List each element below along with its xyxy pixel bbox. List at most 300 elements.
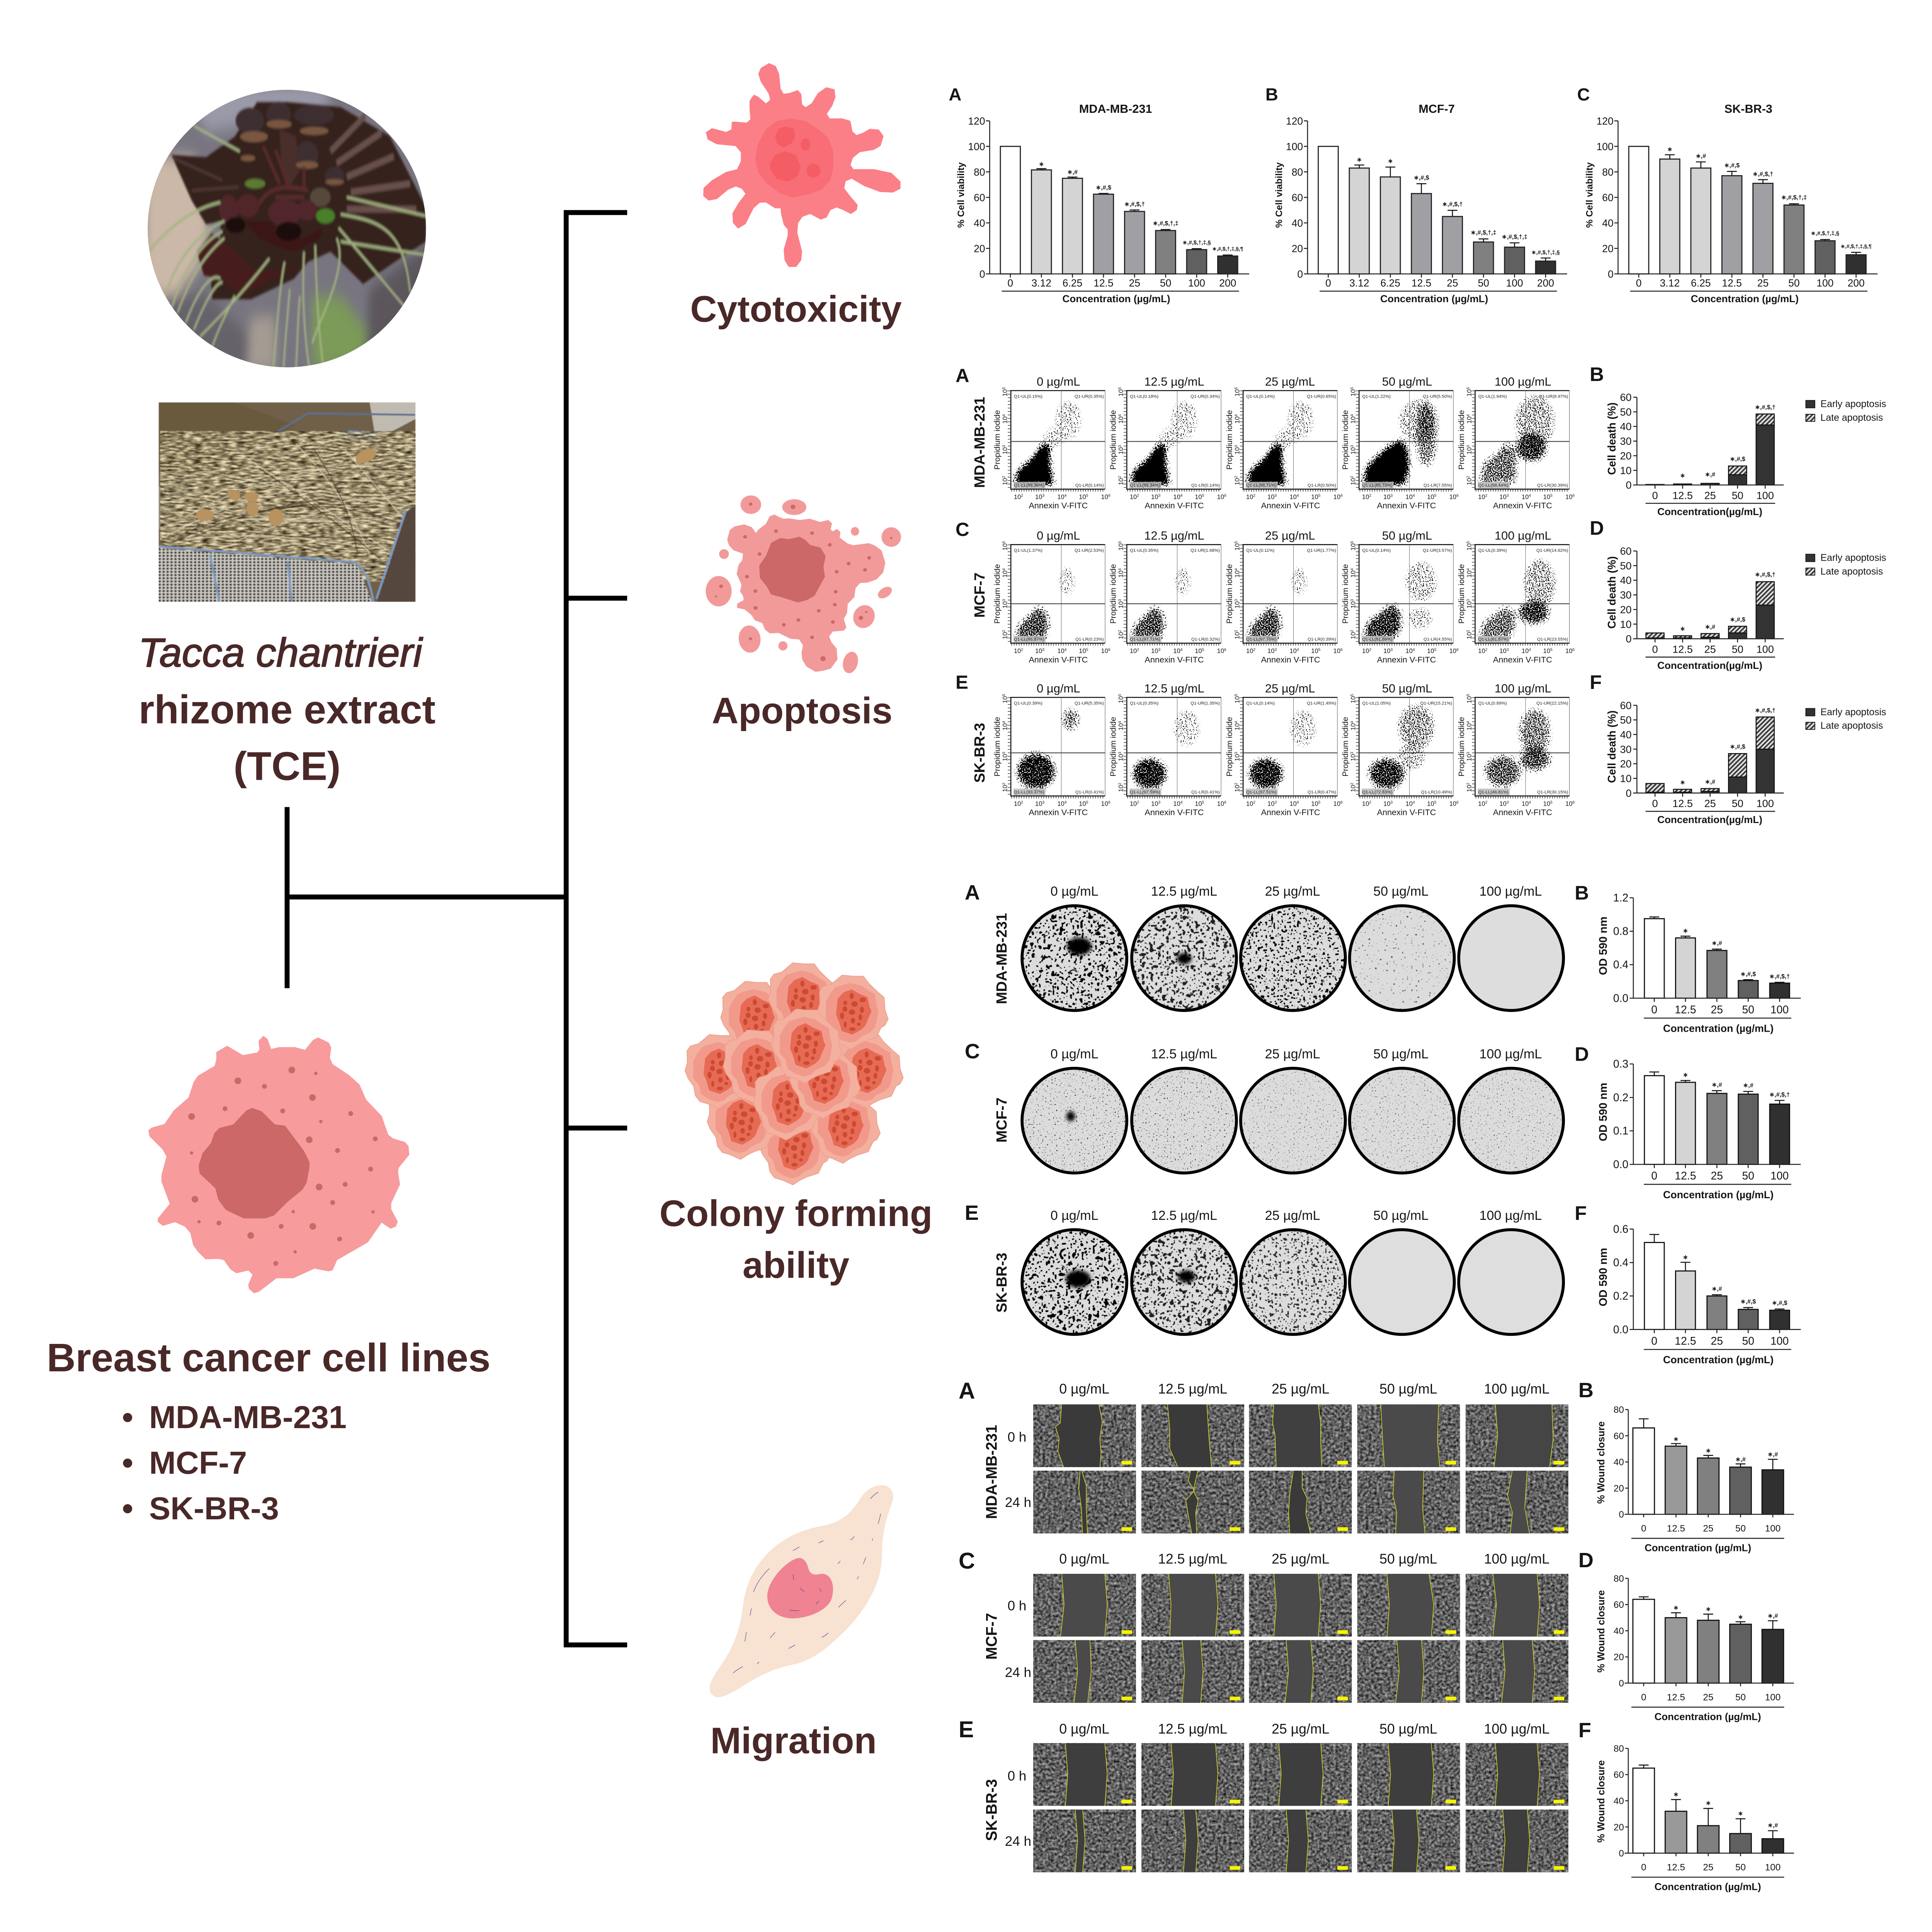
chart D: MCF-7 wound closure: 60 — [1614, 1600, 1624, 1610]
chart B: MCF-7 viability: % Cell viability — [1274, 162, 1284, 228]
image 50 µg/mL 24 h — [1357, 1469, 1460, 1535]
row C: MCF-7 plates: C — [965, 1040, 980, 1063]
row E: SK-BR-3 scatter plots: 0 µg/mL — [1037, 682, 1080, 695]
plot 25 µg/mL: Q1-LL(97.75%) — [1246, 637, 1277, 642]
chart B: MCF-7 viability: 3.12 — [1349, 277, 1369, 289]
chart C: SK-BR-3 viability: 3.12 — [1660, 277, 1680, 289]
row A: MDA-MB-231 wound images — [959, 1378, 1568, 1535]
chart D: MCF-7 OD: ∗ — [1683, 1072, 1688, 1078]
chart C: SK-BR-3 viability: 40 — [1602, 217, 1614, 229]
plot 12.5 µg/mL: Q1-UL(0.35%) — [1130, 701, 1158, 706]
chart B: MCF-7 viability: ∗ — [1357, 157, 1362, 163]
legend: Late apoptosis — [1820, 566, 1883, 577]
plot 12.5 µg/mL — [1109, 694, 1226, 817]
image 12.5 µg/mL 0 h — [1141, 1742, 1244, 1807]
chart D: MCF-7 OD: 0 — [1651, 1170, 1657, 1182]
chart D: MCF-7 OD: D — [1575, 1043, 1589, 1065]
chart A: MDA-MB-231 viability: 12.5 — [1094, 277, 1114, 289]
chart F: SK-BR-3 wound closure: 25 — [1703, 1862, 1713, 1873]
chart F: SK-BR-3 OD: 100 — [1770, 1335, 1789, 1347]
plot 12.5 µg/mL: Q1-LR(0.32%) — [1191, 637, 1220, 642]
plot 25 µg/mL: Q1-LR(0.50%) — [1308, 483, 1336, 488]
row E: SK-BR-3 wound images: 25 µg/mL — [1272, 1721, 1330, 1737]
row A: MDA-MB-231 wound images: 24 h — [1005, 1495, 1031, 1510]
chart B: MCF-7 viability: ∗,#,$,†,‡ — [1502, 234, 1527, 240]
plot 12.5 µg/mL: Q1-LR(0.41%) — [1191, 790, 1220, 795]
row C: MCF-7 plates: MCF-7 — [993, 1097, 1010, 1143]
plot 25 µg/mL: Q1-LR(0.47%) — [1308, 790, 1336, 795]
chart A: MDA-MB-231 viability: ∗,#,$,† — [1124, 201, 1145, 207]
image 100 µg/mL 24 h — [1466, 1469, 1568, 1535]
plot 100 µg/mL: Q1-LR(30.15%) — [1537, 790, 1568, 795]
chart A: MDA-MB-231 viability: A — [949, 85, 961, 104]
row A: MDA-MB-231 wound images: 25 µg/mL — [1272, 1381, 1330, 1397]
plot 0 µg/mL: Q1-LR(0.41%) — [1075, 790, 1104, 795]
chart C: SK-BR-3 viability: ∗,# — [1696, 153, 1706, 160]
chart B: MDA-MB-231 cell death: 50 — [1620, 406, 1632, 418]
legend — [1806, 707, 1886, 731]
chart B: MCF-7 viability: 0 — [1297, 268, 1303, 280]
legend — [1806, 399, 1886, 423]
row C: MCF-7 scatter plots: C — [956, 519, 969, 540]
abbreviation: (TCE) — [233, 744, 341, 789]
chart F: SK-BR-3 OD: ∗ — [1683, 1254, 1688, 1261]
chart F: SK-BR-3 cell death: ∗,#,$ — [1730, 743, 1745, 750]
species name: Tacca chantrieri — [138, 630, 423, 675]
chart B: MCF-7 viability: 120 — [1286, 115, 1303, 127]
chart D: MCF-7 cell death: 40 — [1620, 574, 1632, 586]
plot 100 µg/mL: Propidium iodide — [1457, 717, 1466, 777]
chart D: MCF-7 wound closure: ∗ — [1673, 1605, 1679, 1611]
plot 50 µg/mL: Q1-UL(0.14%) — [1362, 548, 1391, 553]
row A: MDA-MB-231 scatter plots: MDA-MB-231 — [971, 397, 988, 488]
chart B: MCF-7 viability: 100 — [1506, 277, 1523, 289]
image 25 µg/mL 24 h — [1249, 1469, 1352, 1535]
chart B: MDA-MB-231 cell death: 0 — [1626, 479, 1632, 491]
image 100 µg/mL 24 h — [1466, 1808, 1568, 1874]
chart D: MCF-7 cell death: D — [1590, 517, 1604, 539]
image 25 µg/mL 0 h — [1249, 1403, 1352, 1468]
plot 25 µg/mL: Q1-LR(0.39%) — [1308, 637, 1336, 642]
chart F: SK-BR-3 wound closure: ∗,# — [1768, 1822, 1778, 1829]
chart B: MDA-MB-231 cell death: Concentration(µg/mL) — [1657, 506, 1762, 517]
row A: MDA-MB-231 plates: A — [965, 881, 980, 904]
chart A: MDA-MB-231 viability: ∗,#,$,†,‡,§ — [1182, 240, 1211, 246]
image 0 µg/mL 24 h — [1033, 1808, 1136, 1874]
chart A: MDA-MB-231 viability: ∗ — [1039, 161, 1044, 168]
plot 0 µg/mL: Q1-LR(0.23%) — [1075, 637, 1104, 642]
image 25 µg/mL 0 h — [1249, 1742, 1352, 1807]
plot 25 µg/mL: Annexin V-FITC — [1261, 808, 1320, 817]
chart B: MCF-7 viability — [1265, 85, 1567, 304]
chart F: SK-BR-3 cell death: 30 — [1620, 743, 1632, 755]
image 0 µg/mL 0 h — [1033, 1403, 1136, 1468]
row C: MCF-7 wound images: 12.5 µg/mL — [1158, 1551, 1227, 1567]
row A: MDA-MB-231 wound images: 0 µg/mL — [1059, 1381, 1109, 1397]
chart F: SK-BR-3 wound closure: ∗ — [1738, 1811, 1743, 1817]
bullet MDA-MB-231: MDA-MB-231 — [149, 1399, 347, 1435]
row C: MCF-7 plates: 100 µg/mL — [1480, 1047, 1542, 1061]
plot 25 µg/mL: Q1-LL(98.71%) — [1246, 483, 1277, 488]
plot 100 µg/mL: Annexin V-FITC — [1493, 655, 1552, 664]
chart D: MCF-7 wound closure: 25 — [1703, 1692, 1713, 1703]
plot 25 µg/mL: Q1-UL(0.14%) — [1246, 394, 1275, 399]
row C: MCF-7 plates: 12.5 µg/mL — [1151, 1047, 1217, 1061]
chart F: SK-BR-3 OD: OD 590 nm — [1597, 1248, 1609, 1306]
chart F: SK-BR-3 cell death — [1590, 671, 1886, 825]
image 25 µg/mL 0 h — [1249, 1573, 1352, 1638]
photo: Tacca chantrieri flower — [145, 85, 430, 374]
chart B: MCF-7 viability: 20 — [1292, 243, 1303, 254]
row A: MDA-MB-231 plates: 12.5 µg/mL — [1151, 884, 1217, 899]
row A: MDA-MB-231 scatter plots: 0 µg/mL — [1037, 375, 1080, 388]
chart C: SK-BR-3 viability: 200 — [1848, 277, 1865, 289]
chart C: SK-BR-3 viability — [1577, 85, 1878, 304]
plot 0 µg/mL: Annexin V-FITC — [1029, 501, 1088, 510]
image 0 µg/mL 0 h — [1033, 1573, 1136, 1638]
plot 0 µg/mL: Propidium iodide — [993, 564, 1002, 624]
chart A: MDA-MB-231 viability: 120 — [968, 115, 985, 127]
row E: SK-BR-3 wound images: 12.5 µg/mL — [1158, 1721, 1227, 1737]
chart B: MDA-MB-231 cell death — [1590, 363, 1886, 517]
row C: MCF-7 wound images: C — [959, 1548, 975, 1573]
row E: SK-BR-3 wound images: E — [959, 1717, 974, 1742]
chart B: MDA-MB-231 OD: B — [1575, 882, 1589, 904]
chart D: MCF-7 wound closure: % Wound closure — [1596, 1590, 1607, 1673]
chart A: MDA-MB-231 viability: 0 — [1007, 277, 1013, 289]
chart B: MDA-MB-231 cell death: ∗,#,$ — [1730, 456, 1745, 463]
chart C: SK-BR-3 viability: 100 — [1597, 141, 1614, 152]
row A: MDA-MB-231 scatter plots: 25 µg/mL — [1265, 375, 1315, 388]
legend: Early apoptosis — [1820, 707, 1886, 718]
chart B: MCF-7 viability: Concentration (µg/mL) — [1380, 293, 1488, 304]
chart C: SK-BR-3 viability: ∗,#,$,† — [1753, 171, 1773, 177]
chart B: MDA-MB-231 OD: 0.4 — [1613, 959, 1628, 971]
chart D: MCF-7 wound closure: ∗,# — [1768, 1613, 1778, 1619]
plot 12.5 µg/mL: Q1-LL(97.59%) — [1130, 790, 1160, 795]
chart F: SK-BR-3 wound closure: F — [1578, 1719, 1591, 1742]
chart D: MCF-7 wound closure: 12.5 — [1667, 1692, 1685, 1703]
row E: SK-BR-3 wound images: 0 µg/mL — [1059, 1721, 1109, 1737]
chart F: SK-BR-3 cell death: 60 — [1620, 699, 1632, 711]
row E: SK-BR-3 scatter plots: 12.5 µg/mL — [1144, 682, 1204, 695]
chart B: MCF-7 viability: 40 — [1292, 217, 1303, 229]
chart D: MCF-7 cell death: 25 — [1704, 643, 1716, 655]
chart B: MDA-MB-231 wound closure: ∗ — [1673, 1436, 1679, 1442]
chart D: MCF-7 wound closure: 20 — [1614, 1652, 1624, 1663]
chart A: MDA-MB-231 viability — [949, 85, 1249, 304]
dark leaf and flower mass — [172, 102, 426, 299]
chart B: MDA-MB-231 wound closure: % Wound closure — [1596, 1421, 1607, 1504]
chart D: MCF-7 wound closure: 40 — [1614, 1626, 1624, 1636]
plot 100 µg/mL: Q1-UR(8.97%) — [1539, 394, 1568, 399]
chart C: SK-BR-3 viability: 12.5 — [1722, 277, 1742, 289]
chart D: MCF-7 OD: ∗,# — [1712, 1082, 1722, 1088]
chart B: MCF-7 viability: 25 — [1447, 277, 1458, 289]
panel: colony forming plates — [965, 881, 1564, 1335]
chart B: MDA-MB-231 OD — [1575, 882, 1801, 1034]
row E: SK-BR-3 wound images: 50 µg/mL — [1379, 1721, 1437, 1737]
chart D: MCF-7 OD: Concentration (µg/mL) — [1663, 1189, 1774, 1201]
chart D: MCF-7 cell death: 20 — [1620, 604, 1632, 616]
chart B: MCF-7 viability: MCF-7 — [1418, 102, 1455, 116]
plot 0 µg/mL — [993, 694, 1111, 817]
plate 100 µg/mL — [1458, 1229, 1564, 1335]
plot 25 µg/mL — [1225, 694, 1343, 817]
row A: MDA-MB-231 plates: 25 µg/mL — [1265, 884, 1320, 899]
chart D: MCF-7 cell death: 60 — [1620, 545, 1632, 557]
chart B: MDA-MB-231 wound closure: 12.5 — [1667, 1524, 1685, 1534]
plot 25 µg/mL: Q1-UL(0.14%) — [1246, 701, 1275, 706]
chart B: MCF-7 viability: 60 — [1292, 192, 1303, 203]
chart B: MDA-MB-231 OD: 25 — [1711, 1003, 1723, 1016]
chart B: MCF-7 viability: 6.25 — [1380, 277, 1400, 289]
image 50 µg/mL 24 h — [1357, 1808, 1460, 1874]
chart B: MDA-MB-231 cell death: 60 — [1620, 391, 1632, 403]
plot 100 µg/mL — [1457, 541, 1575, 664]
chart B: MDA-MB-231 wound closure: 25 — [1703, 1524, 1713, 1534]
plot 12.5 µg/mL: Q1-LL(99.34%) — [1130, 483, 1160, 488]
chart F: SK-BR-3 wound closure — [1578, 1719, 1794, 1893]
plot 50 µg/mL — [1341, 387, 1459, 510]
chart B: MDA-MB-231 cell death: B — [1590, 363, 1604, 385]
row E: SK-BR-3 plates: 100 µg/mL — [1480, 1208, 1542, 1223]
legend: Early apoptosis — [1820, 399, 1886, 410]
chart C: SK-BR-3 viability: 120 — [1597, 115, 1614, 127]
row C: MCF-7 plates: 0 µg/mL — [1051, 1047, 1099, 1061]
row C: MCF-7 scatter plots: 50 µg/mL — [1382, 529, 1432, 543]
plot 100 µg/mL: Annexin V-FITC — [1493, 808, 1552, 817]
chart F: SK-BR-3 OD: 0 — [1651, 1335, 1657, 1347]
chart F: SK-BR-3 cell death: Cell death (%) — [1606, 711, 1618, 783]
chart A: MDA-MB-231 viability: 6.25 — [1063, 277, 1082, 289]
image 12.5 µg/mL 24 h — [1141, 1639, 1244, 1704]
plot 25 µg/mL: Q1-UL(0.11%) — [1246, 548, 1274, 553]
chart A: MDA-MB-231 viability: ∗,#,$ — [1096, 184, 1111, 191]
row C: MCF-7 wound images: 50 µg/mL — [1379, 1551, 1437, 1567]
chart A: MDA-MB-231 viability: 20 — [974, 243, 985, 254]
chart B: MDA-MB-231 cell death: ∗,#,$,† — [1755, 404, 1776, 411]
chart D: MCF-7 cell death: 100 — [1757, 643, 1774, 655]
chart D: MCF-7 wound closure: 0 — [1619, 1678, 1624, 1689]
chart B: MDA-MB-231 cell death: ∗,# — [1705, 471, 1715, 478]
row E: SK-BR-3 plates: 12.5 µg/mL — [1151, 1208, 1217, 1223]
chart F: SK-BR-3 OD: 0.2 — [1613, 1290, 1628, 1303]
plot 12.5 µg/mL: Propidium iodide — [1109, 717, 1117, 777]
chart D: MCF-7 OD: 0.3 — [1613, 1058, 1628, 1070]
plot 25 µg/mL: Propidium iodide — [1225, 717, 1234, 777]
chart B: MDA-MB-231 OD: 0.8 — [1613, 925, 1628, 938]
row A: MDA-MB-231 scatter plots: 100 µg/mL — [1495, 375, 1551, 388]
image 50 µg/mL 0 h — [1357, 1403, 1460, 1468]
row C: MCF-7 wound images: 24 h — [1005, 1665, 1031, 1680]
row C: MCF-7 plates: 25 µg/mL — [1265, 1047, 1320, 1061]
row E: SK-BR-3 scatter plots: E — [956, 672, 968, 693]
row A: MDA-MB-231 plates: 100 µg/mL — [1480, 884, 1542, 899]
row E: SK-BR-3 scatter plots: SK-BR-3 — [971, 723, 988, 783]
chart D: MCF-7 OD: 0.2 — [1613, 1092, 1628, 1104]
plot 100 µg/mL: Propidium iodide — [1457, 564, 1466, 624]
chart F: SK-BR-3 wound closure: 60 — [1614, 1770, 1624, 1780]
chart D: MCF-7 cell death: ∗,#,$,† — [1755, 571, 1776, 578]
plot 25 µg/mL: Q1-UR(1.77%) — [1307, 548, 1336, 553]
plate 0 µg/mL — [1021, 905, 1128, 1011]
row C: MCF-7 wound images: 0 h — [1008, 1599, 1026, 1614]
plot 12.5 µg/mL: Annexin V-FITC — [1145, 808, 1204, 817]
plot 0 µg/mL: Q1-UL(0.39%) — [1014, 701, 1043, 706]
plot 50 µg/mL: Annexin V-FITC — [1377, 501, 1436, 510]
chart B: MDA-MB-231 OD: ∗,# — [1712, 940, 1722, 947]
row E: SK-BR-3 plates: 25 µg/mL — [1265, 1208, 1320, 1223]
plot 0 µg/mL: Q1-LL(99.36%) — [1014, 483, 1044, 488]
chart F: SK-BR-3 wound closure: % Wound closure — [1596, 1760, 1607, 1843]
image 50 µg/mL 0 h — [1357, 1742, 1460, 1807]
chart D: MCF-7 cell death: ∗ — [1680, 626, 1685, 632]
chart B: MDA-MB-231 OD: OD 590 nm — [1597, 917, 1609, 975]
plot 12.5 µg/mL: Propidium iodide — [1109, 564, 1117, 624]
plot 50 µg/mL: Q1-UL(1.22%) — [1362, 394, 1391, 399]
chart C: SK-BR-3 viability: 80 — [1602, 166, 1614, 178]
plot 50 µg/mL: Q1-LR(7.55%) — [1423, 483, 1452, 488]
chart F: SK-BR-3 OD: 0.0 — [1613, 1323, 1628, 1336]
chart C: SK-BR-3 viability: ∗ — [1667, 146, 1672, 153]
chart A: MDA-MB-231 viability: 0 — [980, 268, 985, 280]
plot 12.5 µg/mL: Annexin V-FITC — [1145, 655, 1204, 664]
chart C: SK-BR-3 viability: C — [1577, 85, 1590, 104]
chart F: SK-BR-3 OD: 12.5 — [1675, 1335, 1696, 1347]
row E: SK-BR-3 scatter plots: 25 µg/mL — [1265, 682, 1315, 695]
plot 100 µg/mL: Q1-LR(23.55%) — [1537, 637, 1568, 642]
chart B: MDA-MB-231 OD: ∗ — [1683, 928, 1688, 934]
chart C: SK-BR-3 viability: SK-BR-3 — [1725, 102, 1772, 116]
plot 50 µg/mL: Propidium iodide — [1341, 564, 1350, 624]
plate 12.5 µg/mL — [1131, 1068, 1237, 1173]
row C: MCF-7 scatter plots: MCF-7 — [971, 573, 988, 618]
chart C: SK-BR-3 viability: ∗,#,$,†,‡ — [1781, 194, 1807, 201]
row C: MCF-7 wound images: 25 µg/mL — [1272, 1551, 1330, 1567]
chart F: SK-BR-3 OD: ∗,#,$ — [1740, 1299, 1756, 1305]
plate 0 µg/mL — [1021, 1068, 1128, 1173]
plot 50 µg/mL: Q1-UL(1.05%) — [1362, 701, 1391, 706]
chart B: MDA-MB-231 wound closure: ∗,# — [1768, 1451, 1778, 1458]
panel: cytotoxicity bar charts — [949, 85, 1878, 304]
heading: breast cancer cell lines: Breast cancer cell lines — [47, 1335, 490, 1380]
chart B: MDA-MB-231 OD: 100 — [1770, 1003, 1789, 1016]
chart B: MCF-7 viability: ∗,#,$,†,‡ — [1471, 230, 1497, 236]
row E: SK-BR-3 plates: 0 µg/mL — [1051, 1208, 1099, 1223]
row C: MCF-7 scatter plots: 25 µg/mL — [1265, 529, 1315, 543]
plot 50 µg/mL: Q1-LL(85.73%) — [1362, 483, 1393, 488]
image 12.5 µg/mL 0 h — [1141, 1403, 1244, 1468]
chart B: MDA-MB-231 OD: 50 — [1742, 1003, 1754, 1016]
chart B: MDA-MB-231 cell death: 25 — [1704, 489, 1716, 501]
plot 0 µg/mL — [993, 541, 1111, 664]
chart D: MCF-7 cell death: ∗,# — [1705, 624, 1715, 631]
row C: MCF-7 wound images: 0 µg/mL — [1059, 1551, 1109, 1567]
chart F: SK-BR-3 cell death: 0 — [1626, 787, 1632, 799]
row E: SK-BR-3 wound images: 0 h — [1008, 1769, 1026, 1784]
chart D: MCF-7 OD: 50 — [1742, 1170, 1754, 1182]
image 50 µg/mL 0 h — [1357, 1573, 1460, 1638]
chart D: MCF-7 OD: 100 — [1770, 1170, 1789, 1182]
icon: colony of cells — [685, 963, 903, 1185]
bullet MCF-7: MCF-7 — [149, 1445, 247, 1481]
plate 50 µg/mL — [1349, 1229, 1455, 1335]
chart C: SK-BR-3 viability: Concentration (µg/mL) — [1691, 293, 1799, 304]
chart F: SK-BR-3 cell death: ∗ — [1680, 779, 1685, 786]
chart C: SK-BR-3 viability: % Cell viability — [1584, 162, 1595, 228]
chart B: MCF-7 viability: ∗,#,$,† — [1442, 201, 1463, 207]
plot 100 µg/mL — [1457, 387, 1575, 510]
plot 0 µg/mL: Q1-UR(5.35%) — [1075, 701, 1104, 706]
chart D: MCF-7 OD: ∗,#,$,† — [1769, 1092, 1790, 1098]
plot 12.5 µg/mL: Q1-UR(1.35%) — [1190, 701, 1220, 706]
chart F: SK-BR-3 cell death: 50 — [1732, 798, 1743, 810]
plot 100 µg/mL: Propidium iodide — [1457, 410, 1466, 470]
plot 50 µg/mL — [1341, 694, 1459, 817]
chart A: MDA-MB-231 viability: 60 — [974, 192, 985, 203]
row C: MCF-7 scatter plots: 100 µg/mL — [1495, 529, 1551, 543]
panel: apoptosis stacked bar charts — [1590, 363, 1886, 825]
chart D: MCF-7 cell death: 30 — [1620, 589, 1632, 601]
image 12.5 µg/mL 24 h — [1141, 1808, 1244, 1874]
chart B: MCF-7 viability: B — [1265, 85, 1278, 104]
chart D: MCF-7 wound closure: ∗ — [1738, 1614, 1743, 1621]
icon: migrating cell — [710, 1485, 893, 1697]
image 100 µg/mL 24 h — [1466, 1639, 1568, 1704]
chart F: SK-BR-3 cell death: 12.5 — [1672, 798, 1693, 810]
row A: MDA-MB-231 wound images: MDA-MB-231 — [983, 1425, 1000, 1519]
chart B: MDA-MB-231 OD: ∗,#,$ — [1740, 971, 1756, 978]
legend: Late apoptosis — [1820, 720, 1883, 731]
list of cell lines — [122, 1399, 347, 1526]
plot 12.5 µg/mL: Q1-UL(0.18%) — [1130, 394, 1158, 399]
chart A: MDA-MB-231 viability: 80 — [974, 166, 985, 178]
chart C: SK-BR-3 viability: 60 — [1602, 192, 1614, 203]
row E: SK-BR-3 plates — [965, 1201, 1564, 1335]
row C: MCF-7 scatter plots — [956, 519, 1575, 664]
chart D: MCF-7 cell death: Cell death (%) — [1606, 556, 1618, 629]
plate 0 µg/mL — [1021, 1229, 1128, 1335]
plot 0 µg/mL — [993, 387, 1111, 510]
chart F: SK-BR-3 cell death: 100 — [1757, 798, 1774, 810]
plate 12.5 µg/mL — [1131, 1229, 1237, 1335]
row A: MDA-MB-231 wound images: 12.5 µg/mL — [1158, 1381, 1227, 1397]
row E: SK-BR-3 scatter plots — [956, 672, 1575, 817]
chart A: MDA-MB-231 viability: 100 — [968, 141, 985, 152]
plot 50 µg/mL: Propidium iodide — [1341, 717, 1350, 777]
heading line 1: Colony forming — [660, 1193, 932, 1234]
chart C: SK-BR-3 viability: 0 — [1608, 268, 1614, 280]
chart C: SK-BR-3 viability: ∗,#,$ — [1724, 162, 1740, 169]
chart B: MDA-MB-231 OD: 0.0 — [1613, 992, 1628, 1005]
connector tree — [287, 210, 627, 1647]
chart B: MDA-MB-231 wound closure: Concentration (µg/mL) — [1645, 1543, 1751, 1554]
title: plant extract — [138, 630, 435, 789]
chart D: MCF-7 wound closure: 100 — [1765, 1692, 1781, 1703]
chart F: SK-BR-3 OD: 25 — [1711, 1335, 1723, 1347]
row C: MCF-7 wound images: MCF-7 — [983, 1613, 1000, 1660]
chart D: MCF-7 OD: 0.0 — [1613, 1158, 1628, 1171]
chart C: SK-BR-3 viability: ∗,#,$,†,‡,§,¶ — [1841, 243, 1872, 249]
chart B: MDA-MB-231 wound closure: 0 — [1619, 1510, 1624, 1520]
plate 50 µg/mL — [1349, 905, 1455, 1011]
heading line 2: ability — [743, 1245, 849, 1286]
chart B: MDA-MB-231 cell death: 30 — [1620, 435, 1632, 447]
plot 25 µg/mL: Q1-UR(1.49%) — [1307, 701, 1336, 706]
row E: SK-BR-3 plates: E — [965, 1201, 979, 1225]
chart B: MDA-MB-231 OD: ∗,#,$,† — [1769, 973, 1790, 980]
